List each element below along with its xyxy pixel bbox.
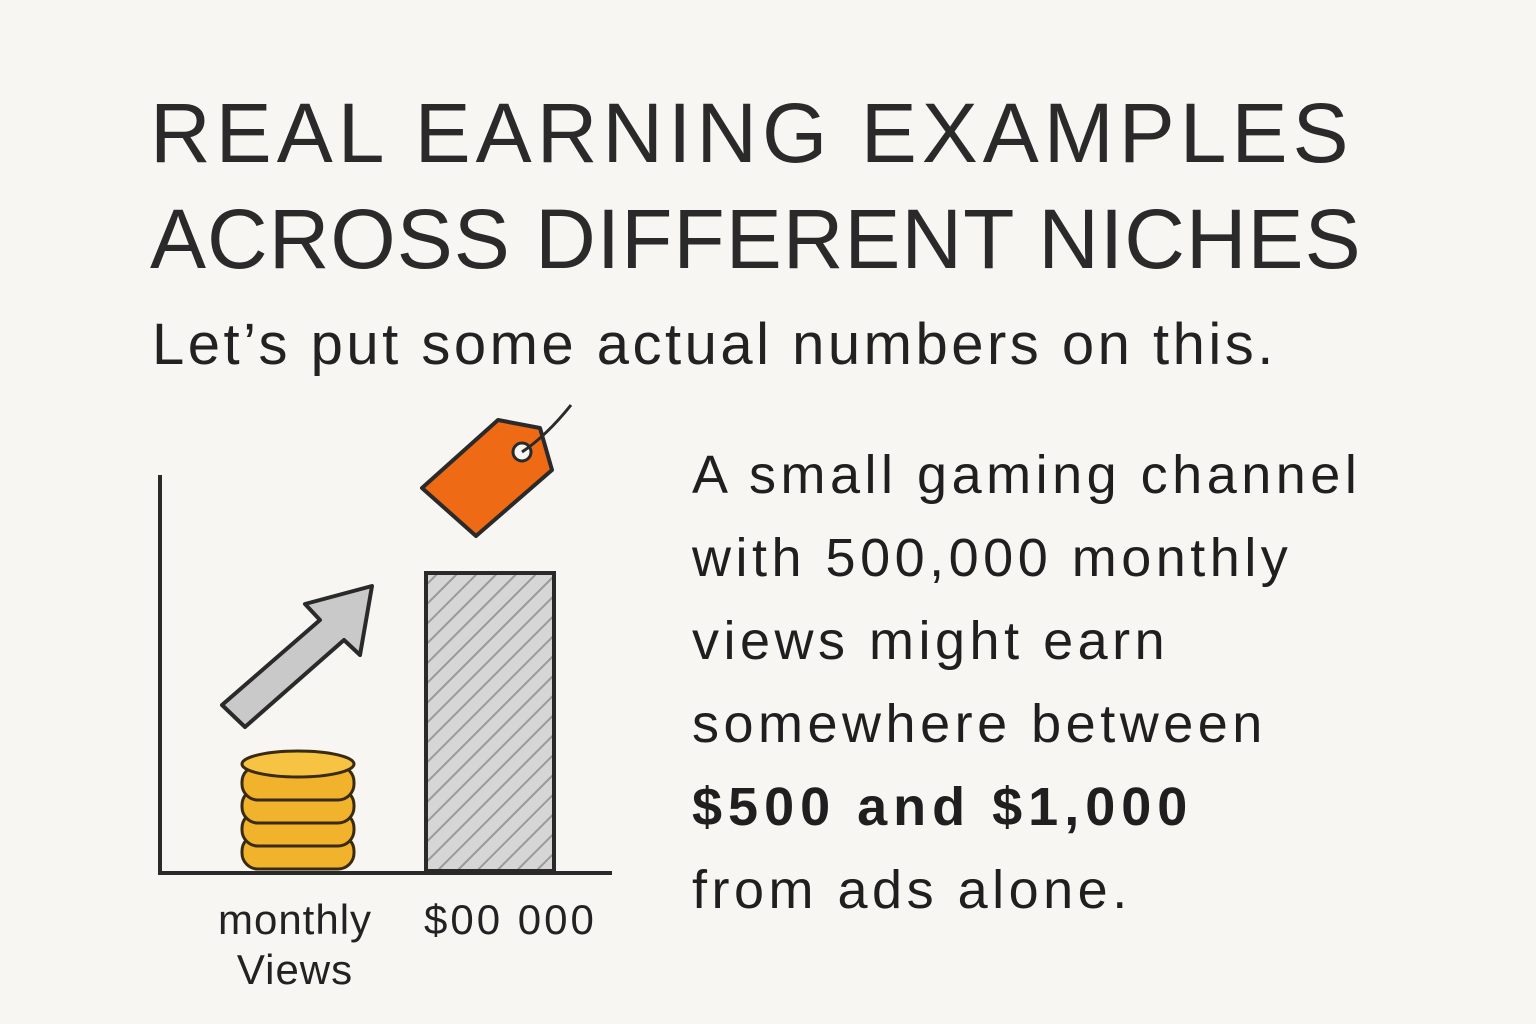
description text xyxy=(692,445,1361,920)
title xyxy=(150,86,1362,286)
title: REAL EARNING EXAMPLES xyxy=(150,86,1354,180)
description text: with 500,000 monthly xyxy=(692,528,1292,588)
axis label: monthly views: monthly xyxy=(218,896,372,943)
axis label: monthly views xyxy=(218,896,372,993)
coins xyxy=(242,751,354,869)
description text: $500 and $1,000 xyxy=(692,777,1193,837)
subtitle: Let’s put some actual numbers on this. xyxy=(152,312,1277,377)
axis label: monthly views: Views xyxy=(237,946,353,993)
axes xyxy=(160,475,612,873)
title: ACROSS DIFFERENT NICHES xyxy=(150,192,1362,286)
description text: somewhere between xyxy=(692,694,1267,754)
description text: views might earn xyxy=(692,611,1169,671)
price tag xyxy=(422,405,571,536)
bar xyxy=(426,573,554,871)
description text: from ads alone. xyxy=(692,860,1132,920)
description text: A small gaming channel xyxy=(692,445,1361,505)
axis label: amount: $00 000 xyxy=(424,896,597,943)
arrow xyxy=(222,586,372,727)
